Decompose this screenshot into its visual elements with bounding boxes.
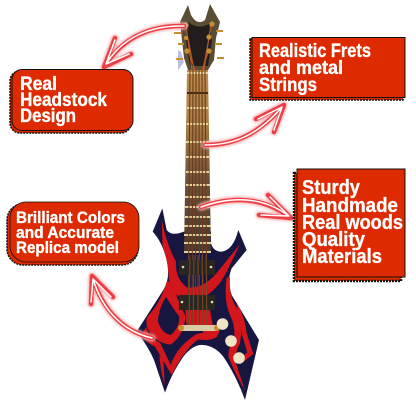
text: Sturdy Handmade Real woods Quality Materials: Materials	[302, 246, 382, 268]
panel: Brilliant Colors	[7, 202, 139, 265]
panel: Sturdy Handmade	[294, 169, 405, 281]
text: Realistic Frets and metal Strings: Strings	[259, 75, 317, 96]
text: Brilliant Colors and Accurate Replica model: Replica model	[16, 238, 119, 257]
flames	[142, 219, 253, 391]
guitar headstock	[174, 4, 224, 70]
text: Realistic Frets and metal Strings: Realistic Frets	[259, 41, 371, 62]
arrow: neck to Sturdy Handmade	[201, 195, 291, 218]
pickups, bridge and knobs	[178, 255, 245, 364]
text: Sturdy Handmade Real woods Quality Materials: Real woods	[302, 212, 403, 234]
text: Sturdy Handmade Real woods Quality Materials	[302, 177, 403, 268]
arrow: neck to Realistic Frets	[205, 105, 284, 145]
text: Real Headstock Design: Real	[20, 74, 57, 95]
text: Sturdy Handmade Real woods Quality Materials: Quality	[302, 229, 366, 251]
text: Real Headstock Design	[20, 74, 107, 127]
guitar body	[137, 208, 259, 400]
text: Real Headstock Design: Headstock	[20, 90, 107, 111]
text: Sturdy Handmade Real woods Quality Materials: Sturdy	[302, 177, 361, 199]
text: Sturdy Handmade Real woods Quality Materials: Handmade	[302, 195, 398, 217]
arrow: body to Brilliant Colors	[91, 276, 152, 338]
panel: Realistic Frets	[250, 38, 405, 100]
guitar neck	[184, 70, 211, 330]
text: Real Headstock Design: Design	[20, 106, 76, 127]
guitar illustration	[137, 4, 259, 400]
text: Realistic Frets and metal Strings	[259, 41, 371, 96]
panel: Real Headstock Design	[10, 70, 133, 133]
text: Brilliant Colors and Accurate Replica model	[16, 208, 125, 257]
arrow: headstock to Real Headstock Design	[104, 26, 184, 67]
text: Brilliant Colors and Accurate Replica model: Brilliant Colors	[16, 208, 125, 227]
text: Brilliant Colors and Accurate Replica model: and Accurate	[16, 223, 114, 242]
text: Realistic Frets and metal Strings: and metal	[259, 58, 343, 79]
